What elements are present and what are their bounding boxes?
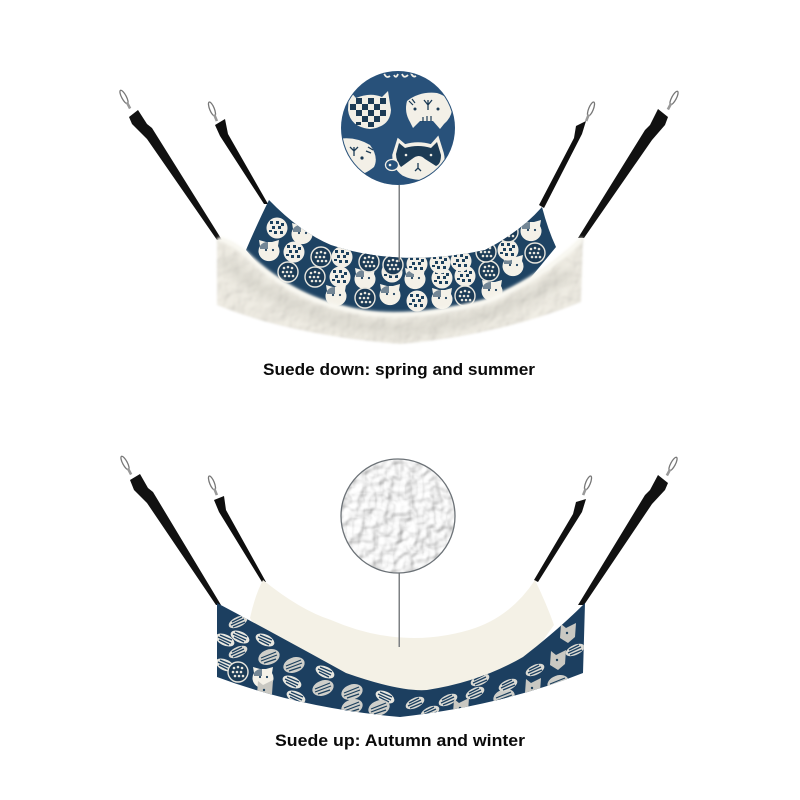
cat: black and white head with button bbox=[386, 137, 444, 179]
straps and clips: top hammock bbox=[118, 89, 680, 240]
small print fragment bbox=[384, 73, 416, 77]
cat: white head with whiskers bbox=[406, 93, 452, 129]
detail circle: fleece texture bbox=[341, 459, 455, 573]
cat: partial head lower left bbox=[343, 138, 376, 173]
detail circle: cat print bbox=[335, 71, 455, 185]
callout line: top bbox=[398, 185, 400, 262]
callout line: bottom bbox=[398, 573, 400, 647]
cat: checkered head bbox=[348, 90, 391, 129]
hammock: suede down, spring and summer bbox=[118, 71, 680, 379]
hammock: suede up, autumn and winter bbox=[119, 455, 679, 750]
caption: suede down: Suede down: spring and summer bbox=[263, 360, 535, 379]
caption: suede up: Suede up: Autumn and winter bbox=[275, 731, 525, 750]
fleece: back of hammock, upward bbox=[250, 580, 554, 700]
fabric: blue cat print front fold bbox=[214, 603, 586, 721]
straps and clips: bottom hammock bbox=[119, 455, 679, 605]
fabric: blue cat print panel bbox=[246, 200, 556, 315]
fleece: front fold of hammock bbox=[217, 237, 583, 344]
